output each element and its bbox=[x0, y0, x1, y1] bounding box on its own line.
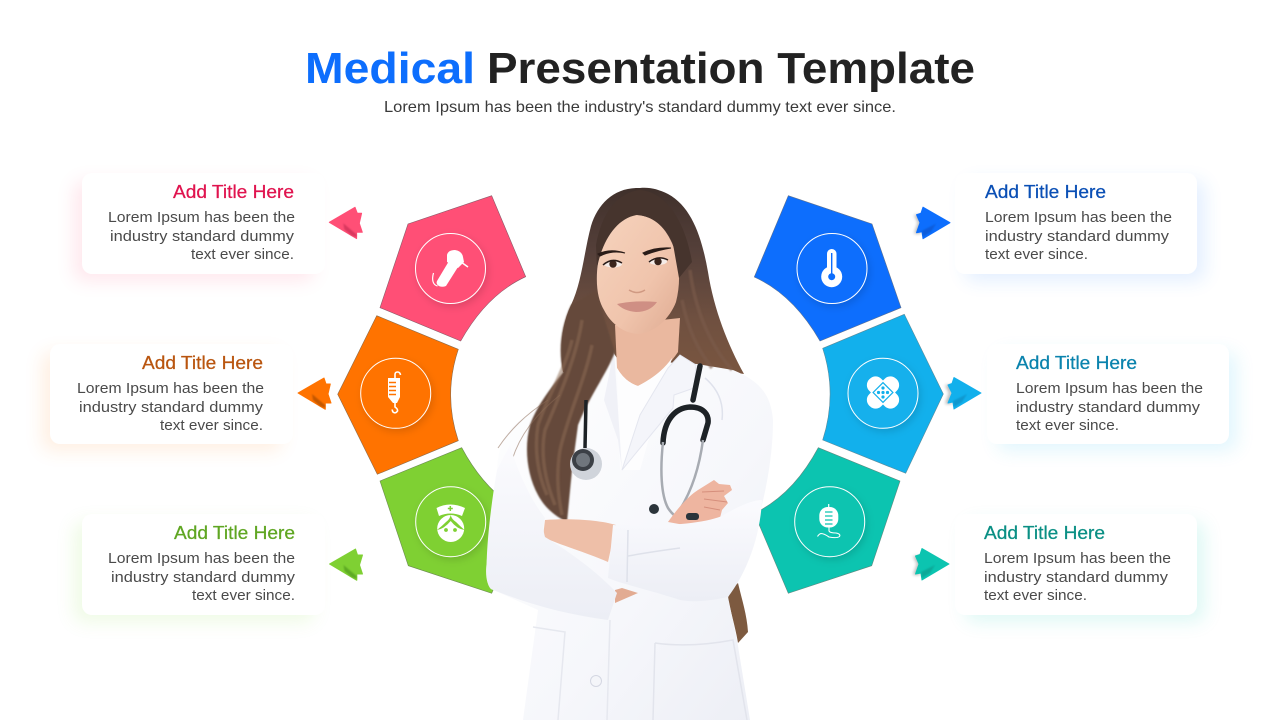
card text: industry standard dummy bbox=[984, 569, 1169, 586]
front hair part bbox=[596, 190, 692, 278]
panel: card teal bbox=[955, 514, 1205, 622]
card text bbox=[108, 209, 295, 263]
hair front lock over coat bbox=[527, 290, 615, 522]
segment: pink pentagon bbox=[380, 196, 526, 341]
segment: teal pentagon bbox=[754, 448, 900, 593]
card text: text ever since. bbox=[985, 246, 1088, 263]
panel: card blue bbox=[955, 173, 1205, 281]
card text: industry standard dummy bbox=[985, 228, 1170, 245]
eyes bbox=[603, 258, 668, 268]
panel: card green bbox=[74, 514, 325, 622]
viewer-right hand bbox=[668, 480, 732, 526]
collar right bbox=[622, 355, 696, 470]
coat shoulder seam bbox=[705, 378, 722, 420]
nose bbox=[629, 290, 645, 292]
icon: blood bag bbox=[795, 487, 865, 557]
eyebrows bbox=[598, 248, 671, 256]
face bbox=[597, 215, 679, 334]
segment: orange pentagon bbox=[338, 316, 458, 474]
hair thin strands bbox=[498, 395, 560, 460]
title words: Presentation Template: Presentation Template bbox=[487, 44, 975, 93]
icon: bandage bbox=[848, 358, 918, 428]
arrow: pink bbox=[329, 207, 362, 239]
card text: Lorem Ipsum has been the bbox=[77, 380, 264, 397]
coat bbox=[486, 350, 773, 720]
card text bbox=[77, 380, 264, 434]
sleeve cuff line bbox=[627, 530, 680, 582]
card heading: Add Title Here bbox=[174, 523, 295, 543]
icon: thermometer bbox=[797, 234, 867, 304]
card text: text ever since. bbox=[191, 246, 294, 263]
card text: text ever since. bbox=[1016, 417, 1119, 434]
card text: text ever since. bbox=[192, 587, 295, 604]
neck bbox=[615, 318, 680, 386]
coat button bbox=[590, 676, 602, 686]
chest piece bbox=[570, 448, 602, 480]
pocket bbox=[653, 640, 747, 720]
icon: dental drill bbox=[416, 234, 486, 304]
hair lock highlights bbox=[536, 320, 592, 515]
silver tubes bbox=[661, 440, 703, 518]
title word: Medical: Medical bbox=[305, 44, 475, 93]
card text: industry standard dummy bbox=[110, 228, 295, 245]
hair back bbox=[562, 188, 744, 375]
segment: cyan pentagon bbox=[823, 314, 943, 473]
illustration: doctor bbox=[486, 188, 773, 720]
icon: IV bag bbox=[361, 358, 431, 428]
icon: nurse bbox=[416, 487, 486, 557]
card text: industry standard dummy bbox=[1016, 399, 1201, 416]
card heading: Add Title Here bbox=[142, 353, 263, 373]
left stethoscope tube bbox=[585, 400, 586, 448]
card text: industry standard dummy bbox=[79, 399, 264, 416]
card text: text ever since. bbox=[160, 417, 263, 434]
card text: Lorem Ipsum has been the bbox=[108, 209, 295, 226]
card heading: Add Title Here bbox=[173, 182, 294, 202]
title bbox=[305, 44, 975, 93]
card text: Lorem Ipsum has been the bbox=[108, 550, 295, 567]
viewer-left forearm bbox=[543, 519, 616, 562]
panel: card cyan bbox=[987, 344, 1237, 451]
card heading: Add Title Here bbox=[984, 523, 1105, 543]
arrow: cyan bbox=[945, 378, 981, 409]
card text: industry standard dummy bbox=[111, 569, 296, 586]
t-shirt bbox=[617, 358, 672, 470]
card text: Lorem Ipsum has been the bbox=[984, 550, 1171, 567]
card text: Lorem Ipsum has been the bbox=[985, 209, 1172, 226]
hair tail behind coat bbox=[728, 583, 748, 643]
arrow: orange bbox=[298, 378, 331, 409]
card text: Lorem Ipsum has been the bbox=[1016, 380, 1203, 397]
viewer-left sleeve bbox=[486, 445, 617, 620]
card heading: Add Title Here bbox=[985, 182, 1106, 202]
collar left bbox=[604, 350, 622, 470]
lower forearm bbox=[615, 588, 638, 603]
lips bbox=[617, 301, 657, 312]
stethoscope ear tips bbox=[649, 504, 699, 520]
card text bbox=[1016, 380, 1203, 434]
subtitle: Lorem Ipsum has been the industry's standard dummy text ever since. bbox=[384, 99, 896, 116]
segment: green pentagon bbox=[380, 448, 526, 593]
arrow: blue bbox=[914, 207, 950, 239]
viewer-right sleeve bbox=[608, 500, 762, 601]
card text bbox=[985, 209, 1172, 263]
arrow: teal bbox=[913, 548, 949, 580]
segment: blue pentagon bbox=[754, 196, 901, 341]
right stethoscope tube bbox=[663, 366, 708, 443]
card text bbox=[984, 550, 1171, 604]
arrow: green bbox=[330, 549, 362, 580]
card text bbox=[108, 550, 296, 604]
hair right side strands bbox=[682, 270, 732, 370]
panel: card orange bbox=[42, 344, 293, 451]
panel: card pink bbox=[74, 173, 325, 281]
coat seam and left pocket bbox=[533, 620, 610, 720]
card text: text ever since. bbox=[984, 587, 1087, 604]
card heading: Add Title Here bbox=[1016, 353, 1137, 373]
